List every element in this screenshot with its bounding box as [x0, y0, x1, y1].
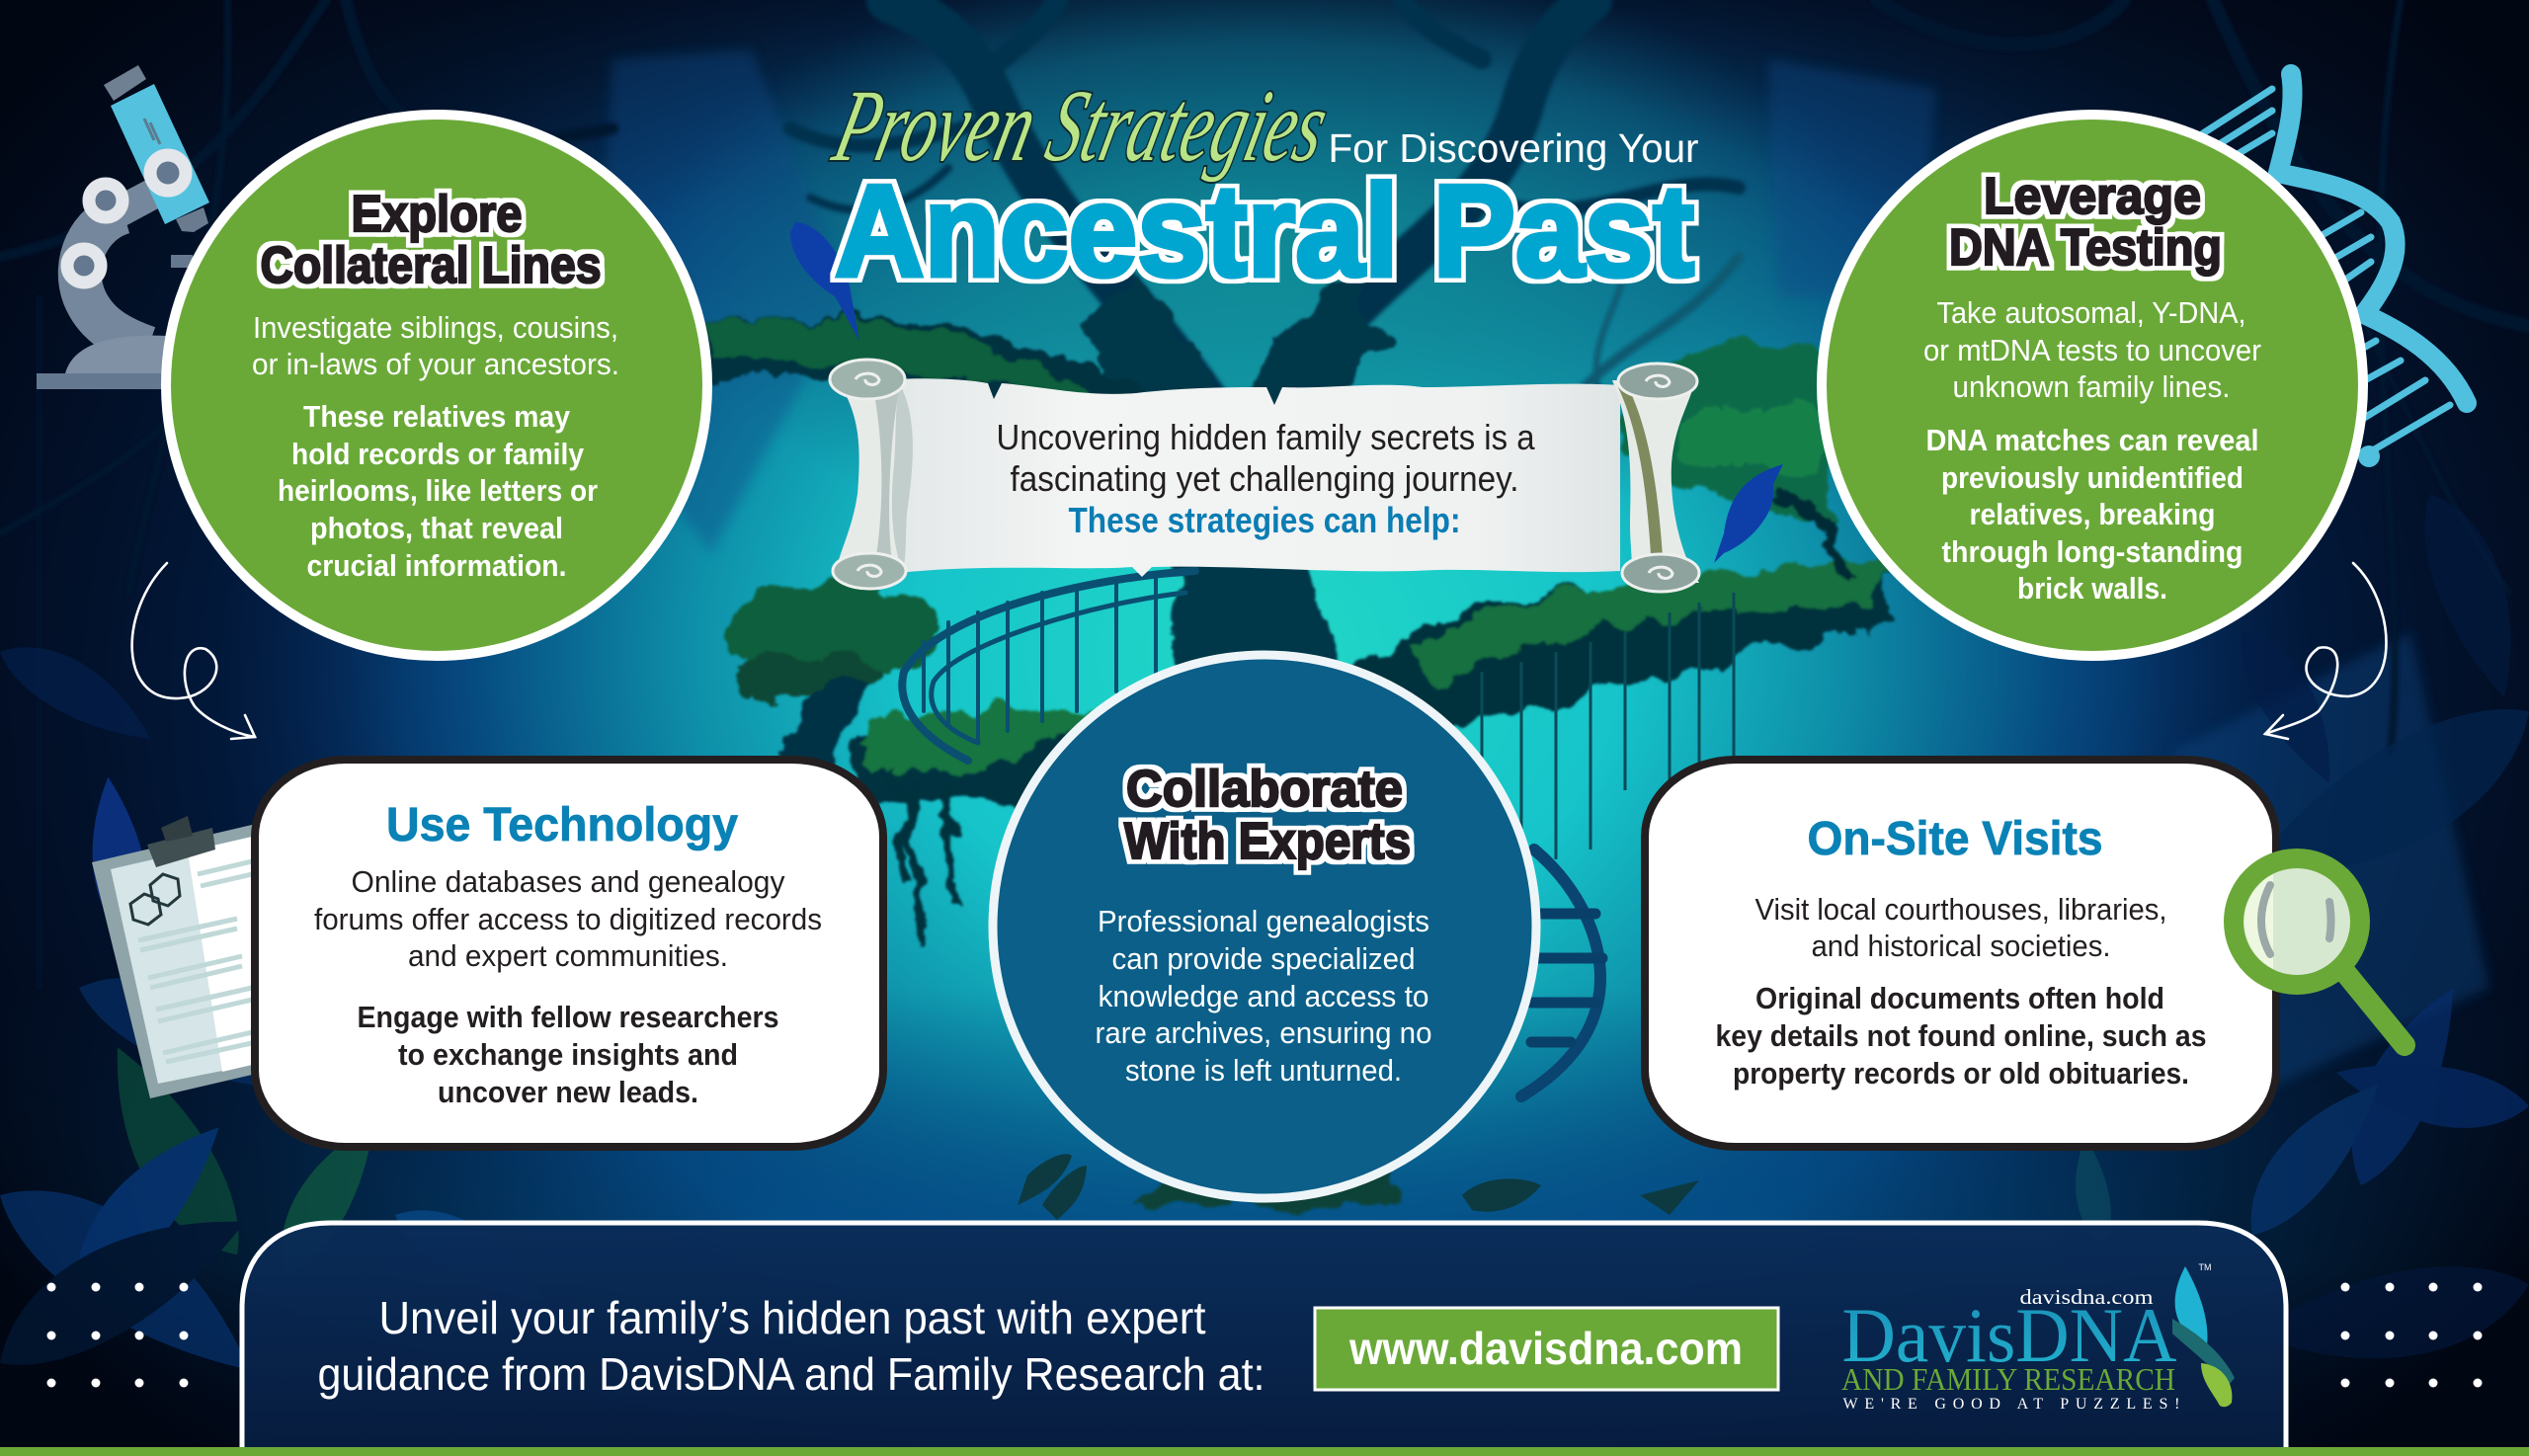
body text: Take autosomal, Y-DNA,	[1936, 295, 2246, 330]
body text: and expert communities.	[408, 938, 728, 973]
title: script line: Proven Strategies	[824, 68, 1339, 183]
DavisDNA logo: davisdna.com	[2019, 1285, 2154, 1309]
body text: forums offer access to digitized records	[314, 902, 822, 936]
body text: and historical societies.	[1812, 929, 2110, 963]
heading: With Experts	[1124, 813, 1411, 870]
hanging vines	[1482, 593, 1734, 988]
icon: DNA helix	[2203, 74, 2467, 467]
title	[824, 68, 1699, 303]
body text	[314, 864, 822, 1109]
icon: magnifying glass	[2234, 858, 2405, 1045]
website button	[1315, 1308, 1778, 1390]
panel: intro scroll	[830, 360, 1699, 592]
DavisDNA logo: AND FAMILY RESEARCH	[1841, 1361, 2175, 1397]
body text: Investigate siblings, cousins,	[253, 310, 618, 345]
heading: Use Technology	[386, 799, 738, 851]
body text	[252, 310, 619, 583]
DavisDNA logo: DavisDNA	[1841, 1292, 2177, 1378]
panel: Use Technology	[255, 760, 883, 1147]
heading: On-Site Visits	[1808, 813, 2102, 865]
body text: These relatives may	[303, 399, 571, 434]
foliage bottom-right	[2067, 481, 2529, 1383]
body text: stone is left unturned.	[1125, 1053, 1402, 1088]
call to action text	[318, 1292, 1264, 1400]
body text: Professional genealogists	[1098, 904, 1429, 938]
icon: microscope	[37, 65, 209, 389]
icon: blue birds	[790, 222, 1783, 563]
body text: uncover new leads.	[438, 1075, 698, 1109]
scroll text	[996, 417, 1535, 540]
body text: photos, that reveal	[310, 511, 563, 545]
body text: unknown family lines.	[1952, 369, 2231, 404]
body text: relatives, breaking	[1970, 497, 2215, 531]
DavisDNA logo: TM	[2199, 1262, 2211, 1272]
body text	[1095, 904, 1432, 1088]
foliage bottom-left	[0, 625, 561, 1401]
panel: Leverage DNA Testing	[1822, 115, 2363, 656]
decorative dots left	[47, 1282, 188, 1387]
DavisDNA logo: WE'RE GOOD AT PUZZLES!	[1843, 1396, 2179, 1413]
body text: Original documents often hold	[1755, 981, 2164, 1015]
call to action text: guidance from DavisDNA and Family Research at:	[318, 1348, 1264, 1400]
body text: through long-standing	[1942, 534, 2243, 569]
green footer bar	[0, 1447, 2529, 1456]
body text	[1923, 295, 2261, 606]
panel: Explore Collateral Lines	[166, 115, 707, 656]
body text: crucial information.	[306, 548, 567, 583]
upper tree limbs	[790, 0, 1739, 415]
body text: can provide specialized	[1112, 941, 1415, 976]
body text: or mtDNA tests to uncover	[1923, 333, 2261, 367]
panel: call to action footer	[242, 1223, 2286, 1456]
body text: to exchange insights and	[398, 1037, 738, 1072]
body text: hold records or family	[291, 437, 585, 471]
heading	[261, 186, 601, 294]
spiral staircase	[902, 571, 1602, 1096]
small ferns and roots below the centre	[1018, 1154, 1699, 1220]
website button: www.davisdna.com	[1348, 1323, 1743, 1374]
body text: knowledge and access to	[1099, 979, 1428, 1013]
body text: heirlooms, like letters or	[278, 473, 598, 508]
scroll text: fascinating yet challenging journey.	[1010, 458, 1519, 499]
body text	[1715, 892, 2207, 1091]
decorative dots right	[2341, 1282, 2482, 1387]
heading: Leverage	[1984, 168, 2201, 225]
heading: Collateral Lines	[261, 237, 601, 294]
arrow: right curl	[2265, 563, 2387, 739]
heading: Collaborate	[1126, 761, 1403, 818]
body text: Engage with fellow researchers	[358, 1000, 778, 1034]
body text: or in-laws of your ancestors.	[252, 347, 619, 381]
title: sans line: For Discovering Your	[1328, 125, 1699, 171]
panel: On-Site Visits	[1645, 760, 2276, 1147]
call to action text: Unveil your family’s hidden past with expert	[379, 1292, 1206, 1343]
heading	[1124, 761, 1411, 870]
heading: DNA Testing	[1949, 219, 2222, 277]
central trunk and mossy branches	[692, 277, 1892, 1205]
heading	[1949, 168, 2222, 277]
body text: previously unidentified	[1941, 460, 2243, 495]
body text: DNA matches can reveal	[1926, 423, 2258, 457]
title: main heading: Ancestral Past	[835, 158, 1694, 303]
body text: property records or old obituaries.	[1733, 1056, 2189, 1091]
panel: Collaborate With Experts	[993, 655, 1536, 1198]
body text: Visit local courthouses, libraries,	[1754, 892, 2167, 927]
body text: Online databases and genealogy	[352, 864, 785, 899]
arrow: left curl	[132, 563, 255, 739]
body text: key details not found online, such as	[1715, 1018, 2207, 1053]
icon: clipboard	[92, 816, 252, 1098]
body text: rare archives, ensuring no	[1095, 1015, 1432, 1050]
heading: Explore	[352, 186, 522, 243]
scroll text: These strategies can help:	[1069, 500, 1460, 540]
body text: brick walls.	[2017, 571, 2167, 606]
scroll text: Uncovering hidden family secrets is a	[996, 417, 1535, 457]
DavisDNA logo	[1841, 1262, 2235, 1413]
